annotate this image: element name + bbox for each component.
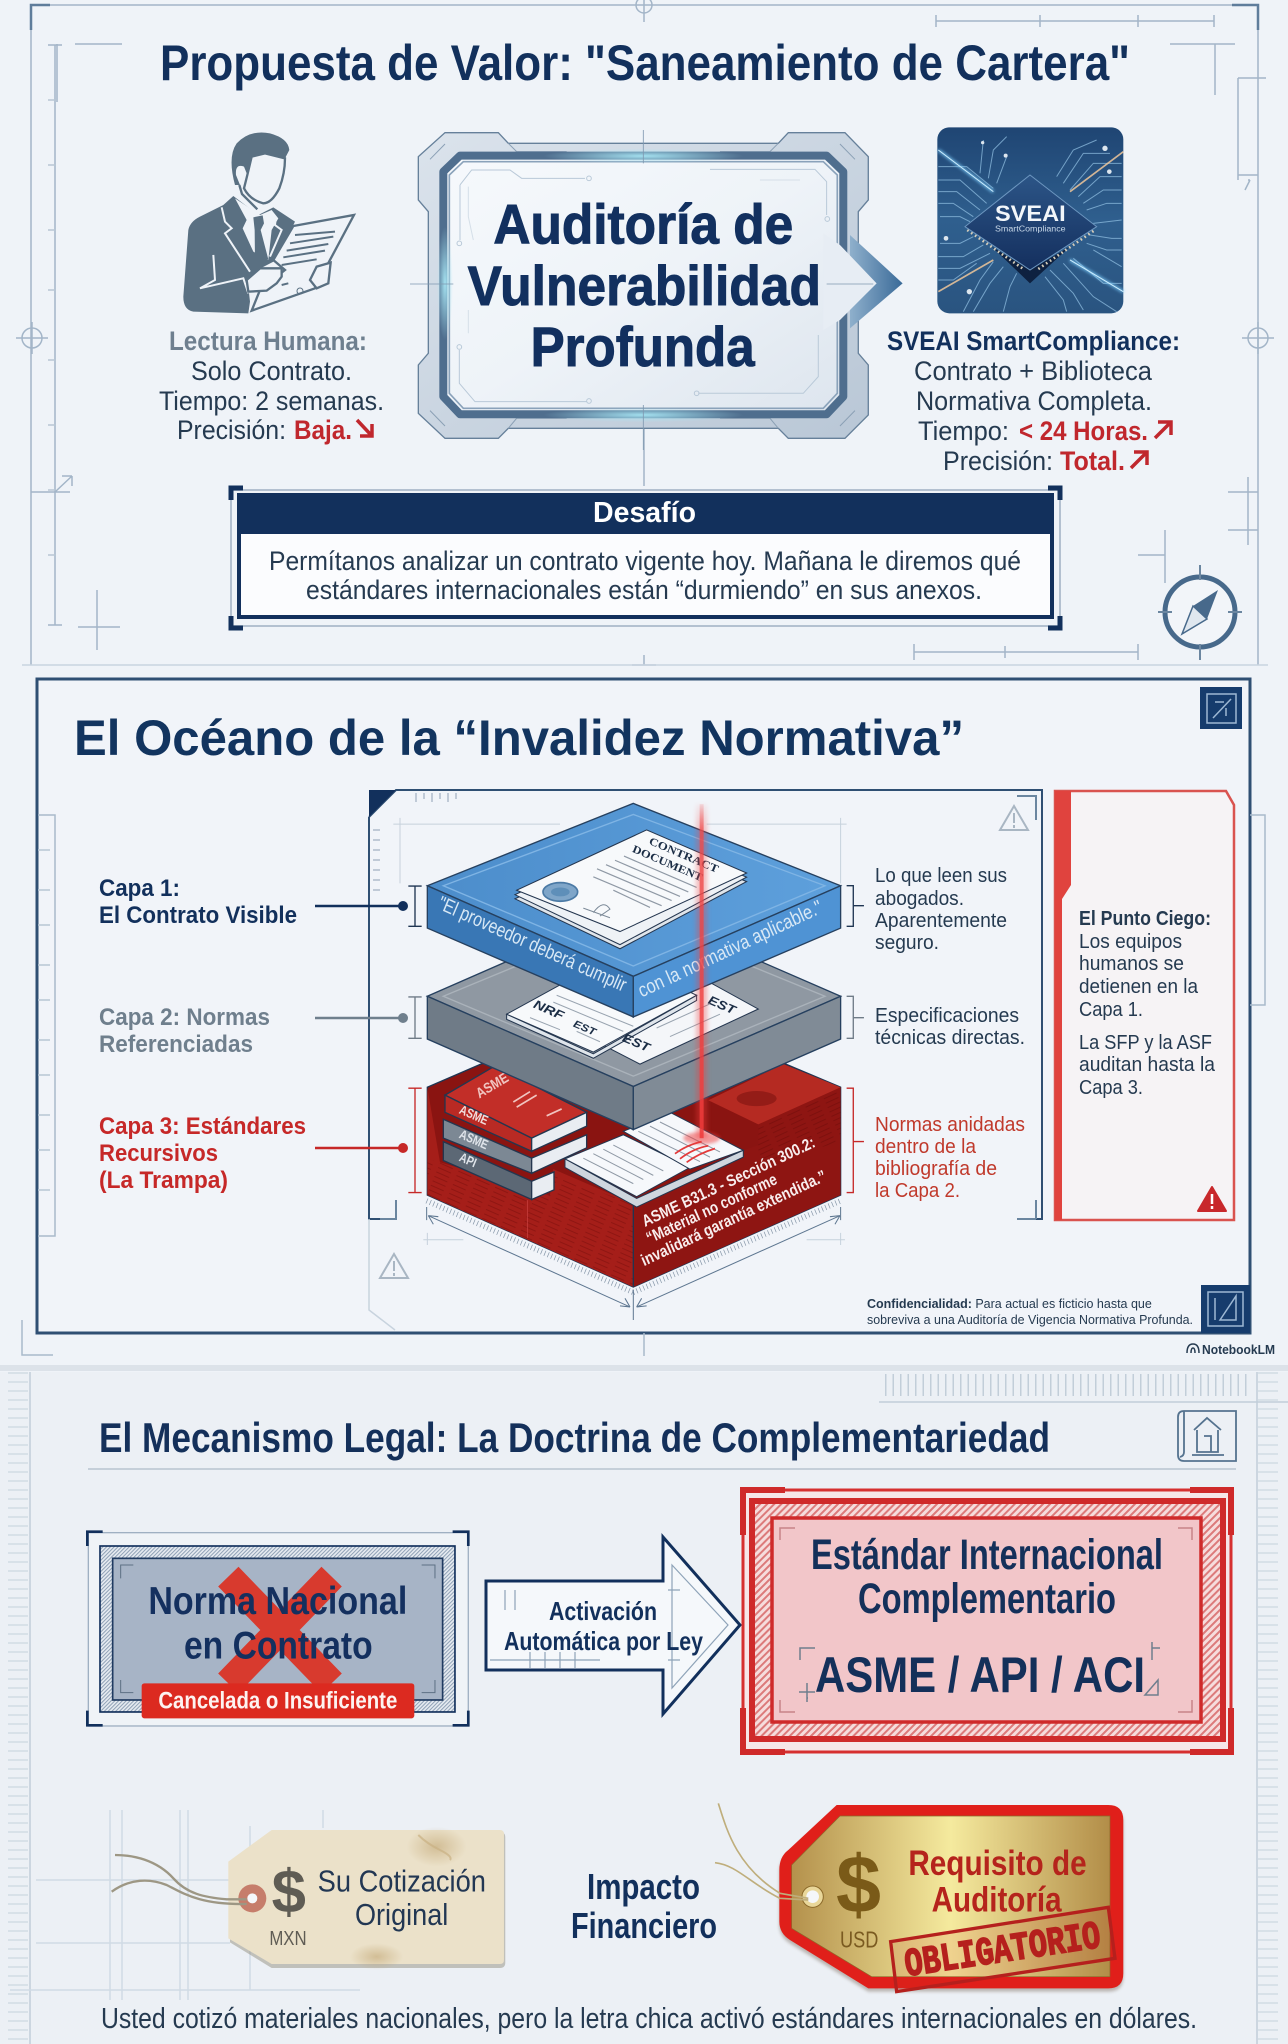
- grid decoration: [10, 1810, 360, 2000]
- price tag: cotización original: MXN: [269, 1928, 307, 1950]
- description: capa 3: bibliografía de: [875, 1158, 997, 1180]
- text block: lectura humana: Tiempo: 2 semanas.: [159, 386, 384, 416]
- label: impacto financiero: [571, 1866, 717, 1946]
- central frame: auditoría de vulnerabilidad profunda: Auditoría de: [493, 192, 793, 255]
- price tag: cotización original: [112, 1827, 505, 1970]
- text block: lectura humana: Lectura Humana:: [169, 326, 367, 356]
- text block: SVEAI SmartCompliance: Tiempo:: [918, 416, 1009, 446]
- label: capa 1: [99, 875, 297, 929]
- price tag: requisito de auditoría: USD: [840, 1926, 878, 1952]
- ruler decorations: [18, 1372, 1288, 2044]
- label: impacto financiero: Financiero: [571, 1905, 717, 1946]
- arrow: activación automática: Automática por Ley: [504, 1626, 703, 1656]
- blueprint frame decoration: [16, 0, 1274, 665]
- box: norma nacional: en Contrato: [184, 1623, 373, 1667]
- confidentiality note: [867, 1297, 1193, 1327]
- panel: mecanismo legal: [0, 1372, 1288, 2044]
- confidentiality note: sobreviva a una Auditoría de Vigencia Normativa Profunda.: [867, 1313, 1193, 1327]
- box: estándar internacional: Estándar Internacional: [811, 1531, 1163, 1579]
- layer 2: grey standards: EST: [620, 1030, 654, 1056]
- text block: SVEAI SmartCompliance: < 24 Horas.: [1019, 416, 1148, 446]
- box: norma nacional: Norma Nacional: [148, 1579, 407, 1623]
- layer 2: grey standards: EST: [706, 993, 739, 1018]
- icon: SVEAI chip: SmartCompliance: [995, 225, 1066, 234]
- box: estándar internacional: [743, 1490, 1231, 1752]
- box: estándar internacional: Complementario: [858, 1575, 1116, 1623]
- text block: SVEAI SmartCompliance: Total.: [1060, 446, 1125, 476]
- text block: lectura humana: Baja.: [294, 415, 352, 445]
- panel: punto ciego: [1055, 791, 1234, 1220]
- NotebookLM mark: NotebookLM: [1202, 1342, 1275, 1357]
- box: norma nacional: [87, 1532, 468, 1726]
- layer 2: grey standards: EST: [571, 1019, 598, 1039]
- text block: lectura humana: Precisión:: [177, 415, 286, 445]
- stacked layers diagram: [393, 803, 864, 1320]
- panel: punto ciego: Capa 1.: [1079, 999, 1143, 1021]
- central frame: auditoría de vulnerabilidad profunda: [410, 130, 903, 450]
- title: océano: El Océano de la “Invalidez Normativa”: [74, 710, 964, 766]
- red X: [228, 1577, 332, 1683]
- text block: SVEAI SmartCompliance: [887, 326, 1180, 476]
- label: capa 3: Recursivos: [99, 1140, 218, 1167]
- panel: punto ciego: humanos se: [1079, 953, 1184, 975]
- layer 3: red standards: [427, 1063, 841, 1287]
- layer 2: grey standards: NRF: [531, 997, 567, 1023]
- callout: desafío: Desafío: [593, 497, 696, 529]
- callout: desafío: Permítanos analizar un contrato vigente hoy. Mañana le diremos qué: [269, 546, 1021, 576]
- icon: man reading a document: [183, 132, 354, 313]
- layer 3: red standards: ASME: [473, 1070, 512, 1102]
- callout: desafío: [231, 488, 1060, 628]
- price tag: requisito de auditoría: Auditoría: [932, 1881, 1062, 1920]
- price tag: requisito de auditoría: $: [836, 1840, 881, 1931]
- description: capa 2: Especificaciones: [875, 1005, 1019, 1027]
- description: capa 1: [875, 865, 1007, 954]
- label: impacto financiero: Impacto: [587, 1866, 700, 1907]
- description: capa 3: Normas anidadas: [875, 1114, 1025, 1136]
- layer 3: red standards: ASME B31.3 - Sección 300.2:: [639, 1133, 818, 1231]
- panel: punto ciego: Los equipos: [1079, 931, 1182, 953]
- layer 3: red standards: ASME: [457, 1126, 491, 1153]
- diagram frame: [369, 790, 1042, 1330]
- icon: grey warning triangle top: [1000, 806, 1028, 830]
- icon: grey warning triangle bottom: [380, 1254, 408, 1278]
- panel: propuesta de valor: [16, 0, 1274, 665]
- description: capa 2: técnicas directas.: [875, 1027, 1025, 1049]
- description: capa 1: Aparentemente: [875, 910, 1007, 932]
- layer 1: blue contract: "El proveedor deberá cumplir: [435, 892, 630, 997]
- title: mecanismo legal: El Mecanismo Legal: La Doctrina de Complementariedad: [99, 1414, 1050, 1461]
- panel: océano de la invalidez normativa: [0, 679, 1288, 1368]
- badge: cancelada: Cancelada o Insuficiente: [158, 1688, 397, 1715]
- documents on layer 2: [507, 956, 758, 1064]
- icon: compass: [1158, 565, 1242, 660]
- panel: punto ciego: El Punto Ciego:: [1079, 908, 1211, 930]
- badge: cancelada: [142, 1683, 414, 1718]
- laser beam: [683, 804, 720, 1144]
- label: capa 2: [99, 1004, 270, 1058]
- box: estándar internacional: ASME / API / ACI: [815, 1647, 1145, 1703]
- description: capa 3: dentro de la: [875, 1136, 977, 1158]
- confidentiality note: Confidencialidad: Para actual es ficticio hasta que: [867, 1297, 1152, 1311]
- panel: punto ciego: detienen en la: [1079, 976, 1199, 998]
- label: capa 3: Capa 3: Estándares: [99, 1113, 306, 1140]
- panel: punto ciego: La SFP y la ASF: [1079, 1032, 1212, 1054]
- label: capa 1: El Contrato Visible: [99, 902, 297, 929]
- description: capa 2: [875, 1005, 1025, 1049]
- layer 1: blue contract: CONTRACT: [647, 835, 721, 876]
- layer 1: blue contract: DOCUMENT: [631, 843, 705, 884]
- text block: lectura humana: Solo Contrato.: [191, 356, 352, 386]
- label: capa 1: Capa 1:: [99, 875, 180, 902]
- text block: SVEAI SmartCompliance: Normativa Completa.: [916, 386, 1152, 416]
- layer 3: red standards: ASME: [457, 1102, 491, 1128]
- central frame: auditoría de vulnerabilidad profunda: Vulnerabilidad: [468, 254, 821, 317]
- icon: blueprint bottom right: [1201, 1285, 1250, 1333]
- open book: [565, 1112, 743, 1207]
- callout: desafío: estándares internacionales están “durmiendo” en sus anexos.: [306, 575, 982, 605]
- layer 1: blue contract: con la normativa aplicable.": [635, 896, 826, 1002]
- layer 3: red standards: invalidará garantía extendida.”: [638, 1167, 829, 1270]
- layer 2: grey standards: [427, 906, 841, 1130]
- brackets and leaders: [408, 886, 864, 1193]
- price tag: requisito de auditoría: [715, 1803, 1123, 1992]
- description: capa 1: abogados.: [875, 888, 964, 910]
- description: capa 3: [875, 1114, 1025, 1202]
- price tag: cotización original: Su Cotización: [318, 1865, 486, 1899]
- label: capa 3: [99, 1113, 306, 1194]
- icon: red warning triangle: [1198, 1187, 1226, 1211]
- stamp: obligatorio: OBLIGATORIO: [902, 1914, 1104, 1988]
- title: propuesta de valor: Propuesta de Valor: "Saneamiento de Cartera": [160, 35, 1130, 91]
- description: capa 1: seguro.: [875, 932, 939, 954]
- rulers: [427, 1201, 841, 1320]
- description: capa 3: la Capa 2.: [875, 1180, 960, 1202]
- text block: lectura humana: [159, 326, 384, 445]
- layer 1: blue contract: [427, 803, 841, 1017]
- price tag: cotización original: Original: [355, 1898, 448, 1932]
- layer 3: red standards: “Material no conforme: [644, 1170, 780, 1248]
- price tag: cotización original: $: [272, 1857, 306, 1926]
- panel: punto ciego: Capa 3.: [1079, 1077, 1143, 1099]
- arrow: activación automática: [486, 1537, 740, 1714]
- side rulers decoration: [0, 815, 1288, 1368]
- icon: blueprint house: [1178, 1411, 1236, 1461]
- arrow: activación automática: Activación: [549, 1596, 657, 1626]
- panel: punto ciego: auditan hasta la: [1079, 1054, 1216, 1076]
- text block: SVEAI SmartCompliance: Contrato + Biblioteca: [914, 356, 1153, 386]
- text block: SVEAI SmartCompliance: SVEAI SmartCompliance:: [887, 326, 1180, 356]
- books: [443, 1066, 587, 1199]
- label: capa 2: Capa 2: Normas: [99, 1004, 270, 1031]
- price tag: requisito de auditoría: Requisito de: [908, 1844, 1087, 1883]
- central frame: auditoría de vulnerabilidad profunda: Profunda: [531, 315, 755, 378]
- icon: SVEAI chip: SVEAI: [995, 201, 1066, 226]
- label: capa 3: (La Trampa): [99, 1167, 228, 1194]
- icon: blueprint top right: [1200, 687, 1242, 729]
- text block: SVEAI SmartCompliance: Precisión:: [943, 446, 1053, 476]
- description: capa 1: Lo que leen sus: [875, 865, 1007, 887]
- layer 3: red standards: API: [457, 1149, 479, 1170]
- leader lines: [315, 901, 408, 1153]
- icon: SVEAI chip: [937, 127, 1123, 313]
- label: capa 2: Referenciadas: [99, 1031, 253, 1058]
